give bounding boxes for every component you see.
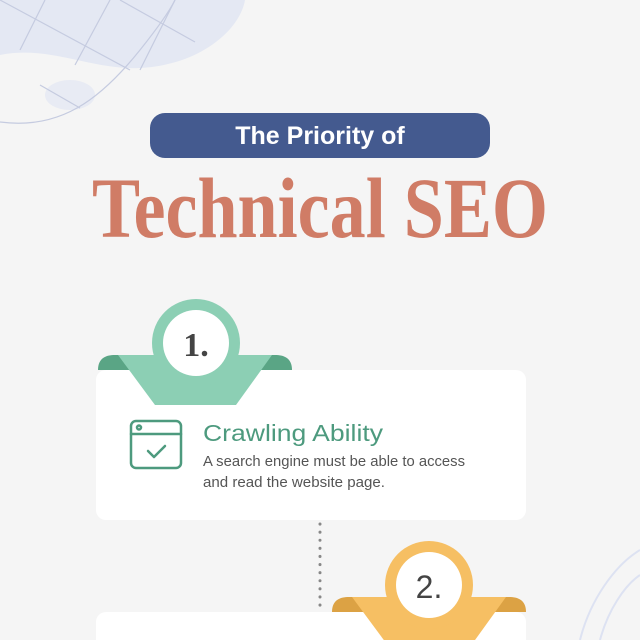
description: and read the website page. <box>203 475 385 491</box>
description: A search engine must be able to access <box>203 454 465 470</box>
subtitle pill <box>150 113 490 158</box>
dotted connector <box>318 524 322 612</box>
heading: Crawling Ability <box>203 420 384 446</box>
card 2 <box>96 541 526 640</box>
icon: browser check <box>131 421 181 468</box>
ribbon 1 <box>98 299 292 405</box>
subtitle pill: The Priority of <box>235 122 405 150</box>
decoration: bottom-right arcs <box>580 550 640 640</box>
decoration: top-left blob with grid <box>0 0 245 123</box>
title: Technical SEO <box>92 160 548 256</box>
ribbon 2 <box>332 541 526 640</box>
card 1 <box>96 299 526 520</box>
ribbon 1: 1. <box>183 327 209 364</box>
ribbon 2: 2. <box>416 569 442 605</box>
